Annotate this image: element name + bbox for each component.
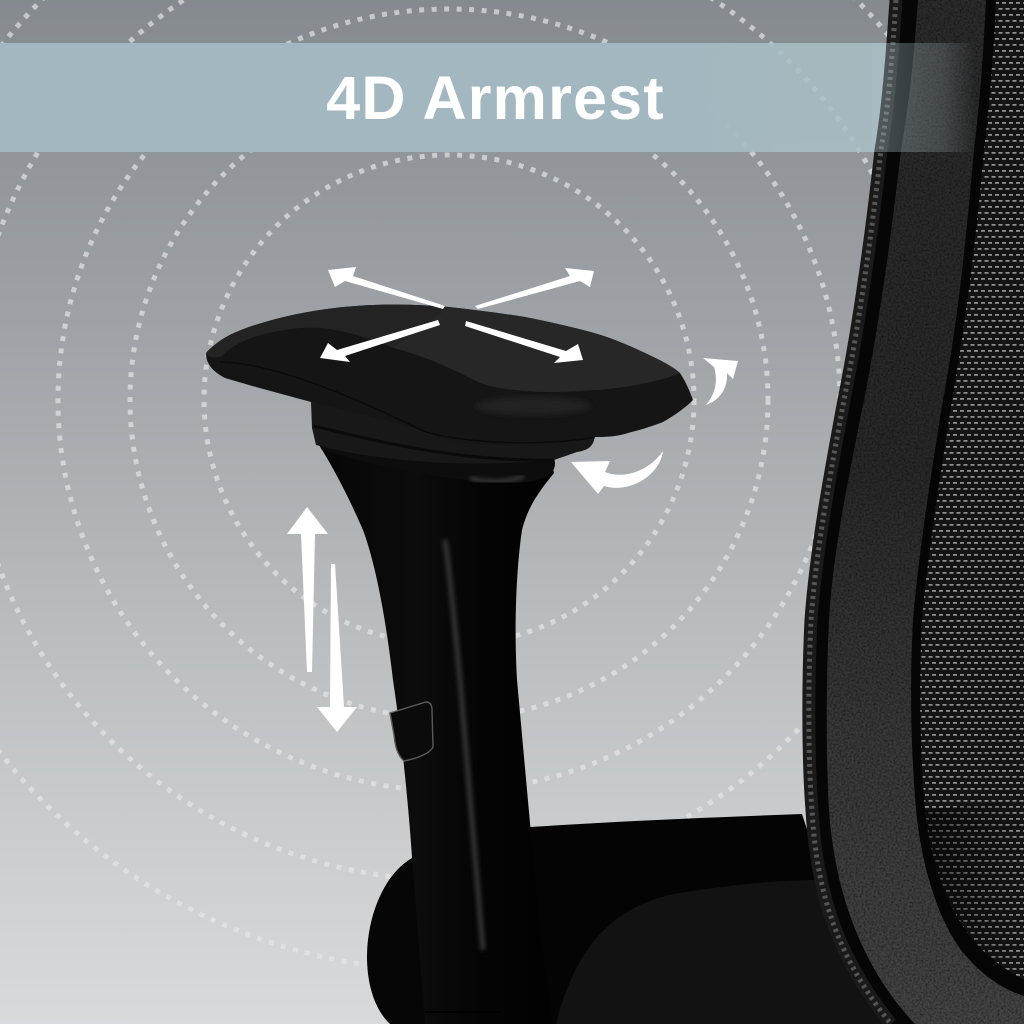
white adjustment arrow: swivel [571, 451, 663, 494]
white adjustment arrows: horizontal [320, 267, 594, 363]
banner overlay on backrest [872, 43, 982, 152]
pad left wing surface [206, 305, 449, 357]
banner band [0, 43, 1024, 152]
arrow: front left [320, 320, 440, 362]
white adjustment arrow: up [287, 507, 328, 672]
white adjustment arrow: tilt [703, 358, 738, 405]
padded border texture [827, 0, 1024, 1024]
mesh lower shading [925, 800, 1024, 980]
arrow: front right [465, 321, 583, 363]
backrest padded border [827, 0, 1024, 1024]
armrest swivel collar [316, 440, 555, 483]
backrest mesh panel [920, 0, 1024, 980]
white adjustment arrow: down [317, 564, 357, 732]
pad lower body [206, 305, 693, 445]
post highlight [445, 540, 483, 950]
seat side pivot [367, 857, 440, 1024]
arm pad [206, 305, 693, 445]
armrest post [316, 432, 554, 1024]
pad right surface [394, 307, 680, 392]
mesh inner black edge [911, 0, 1024, 996]
backrest black base [803, 0, 1024, 1024]
pad rim line [220, 362, 595, 443]
arrow: back left [328, 267, 445, 309]
seat mesh fabric [556, 880, 885, 1024]
base groove [314, 426, 554, 460]
backrest piping [809, 0, 896, 1024]
post end joint line [425, 1011, 500, 1013]
armrest release button [390, 702, 433, 761]
pad mottled front patch [475, 397, 591, 415]
arrow: back right [475, 268, 594, 309]
collar highlight [470, 476, 524, 482]
chair backrest [803, 0, 1024, 1024]
armrest swivel base [311, 402, 595, 464]
title: 4D Armrest [326, 64, 665, 132]
chair seat [530, 814, 885, 1024]
